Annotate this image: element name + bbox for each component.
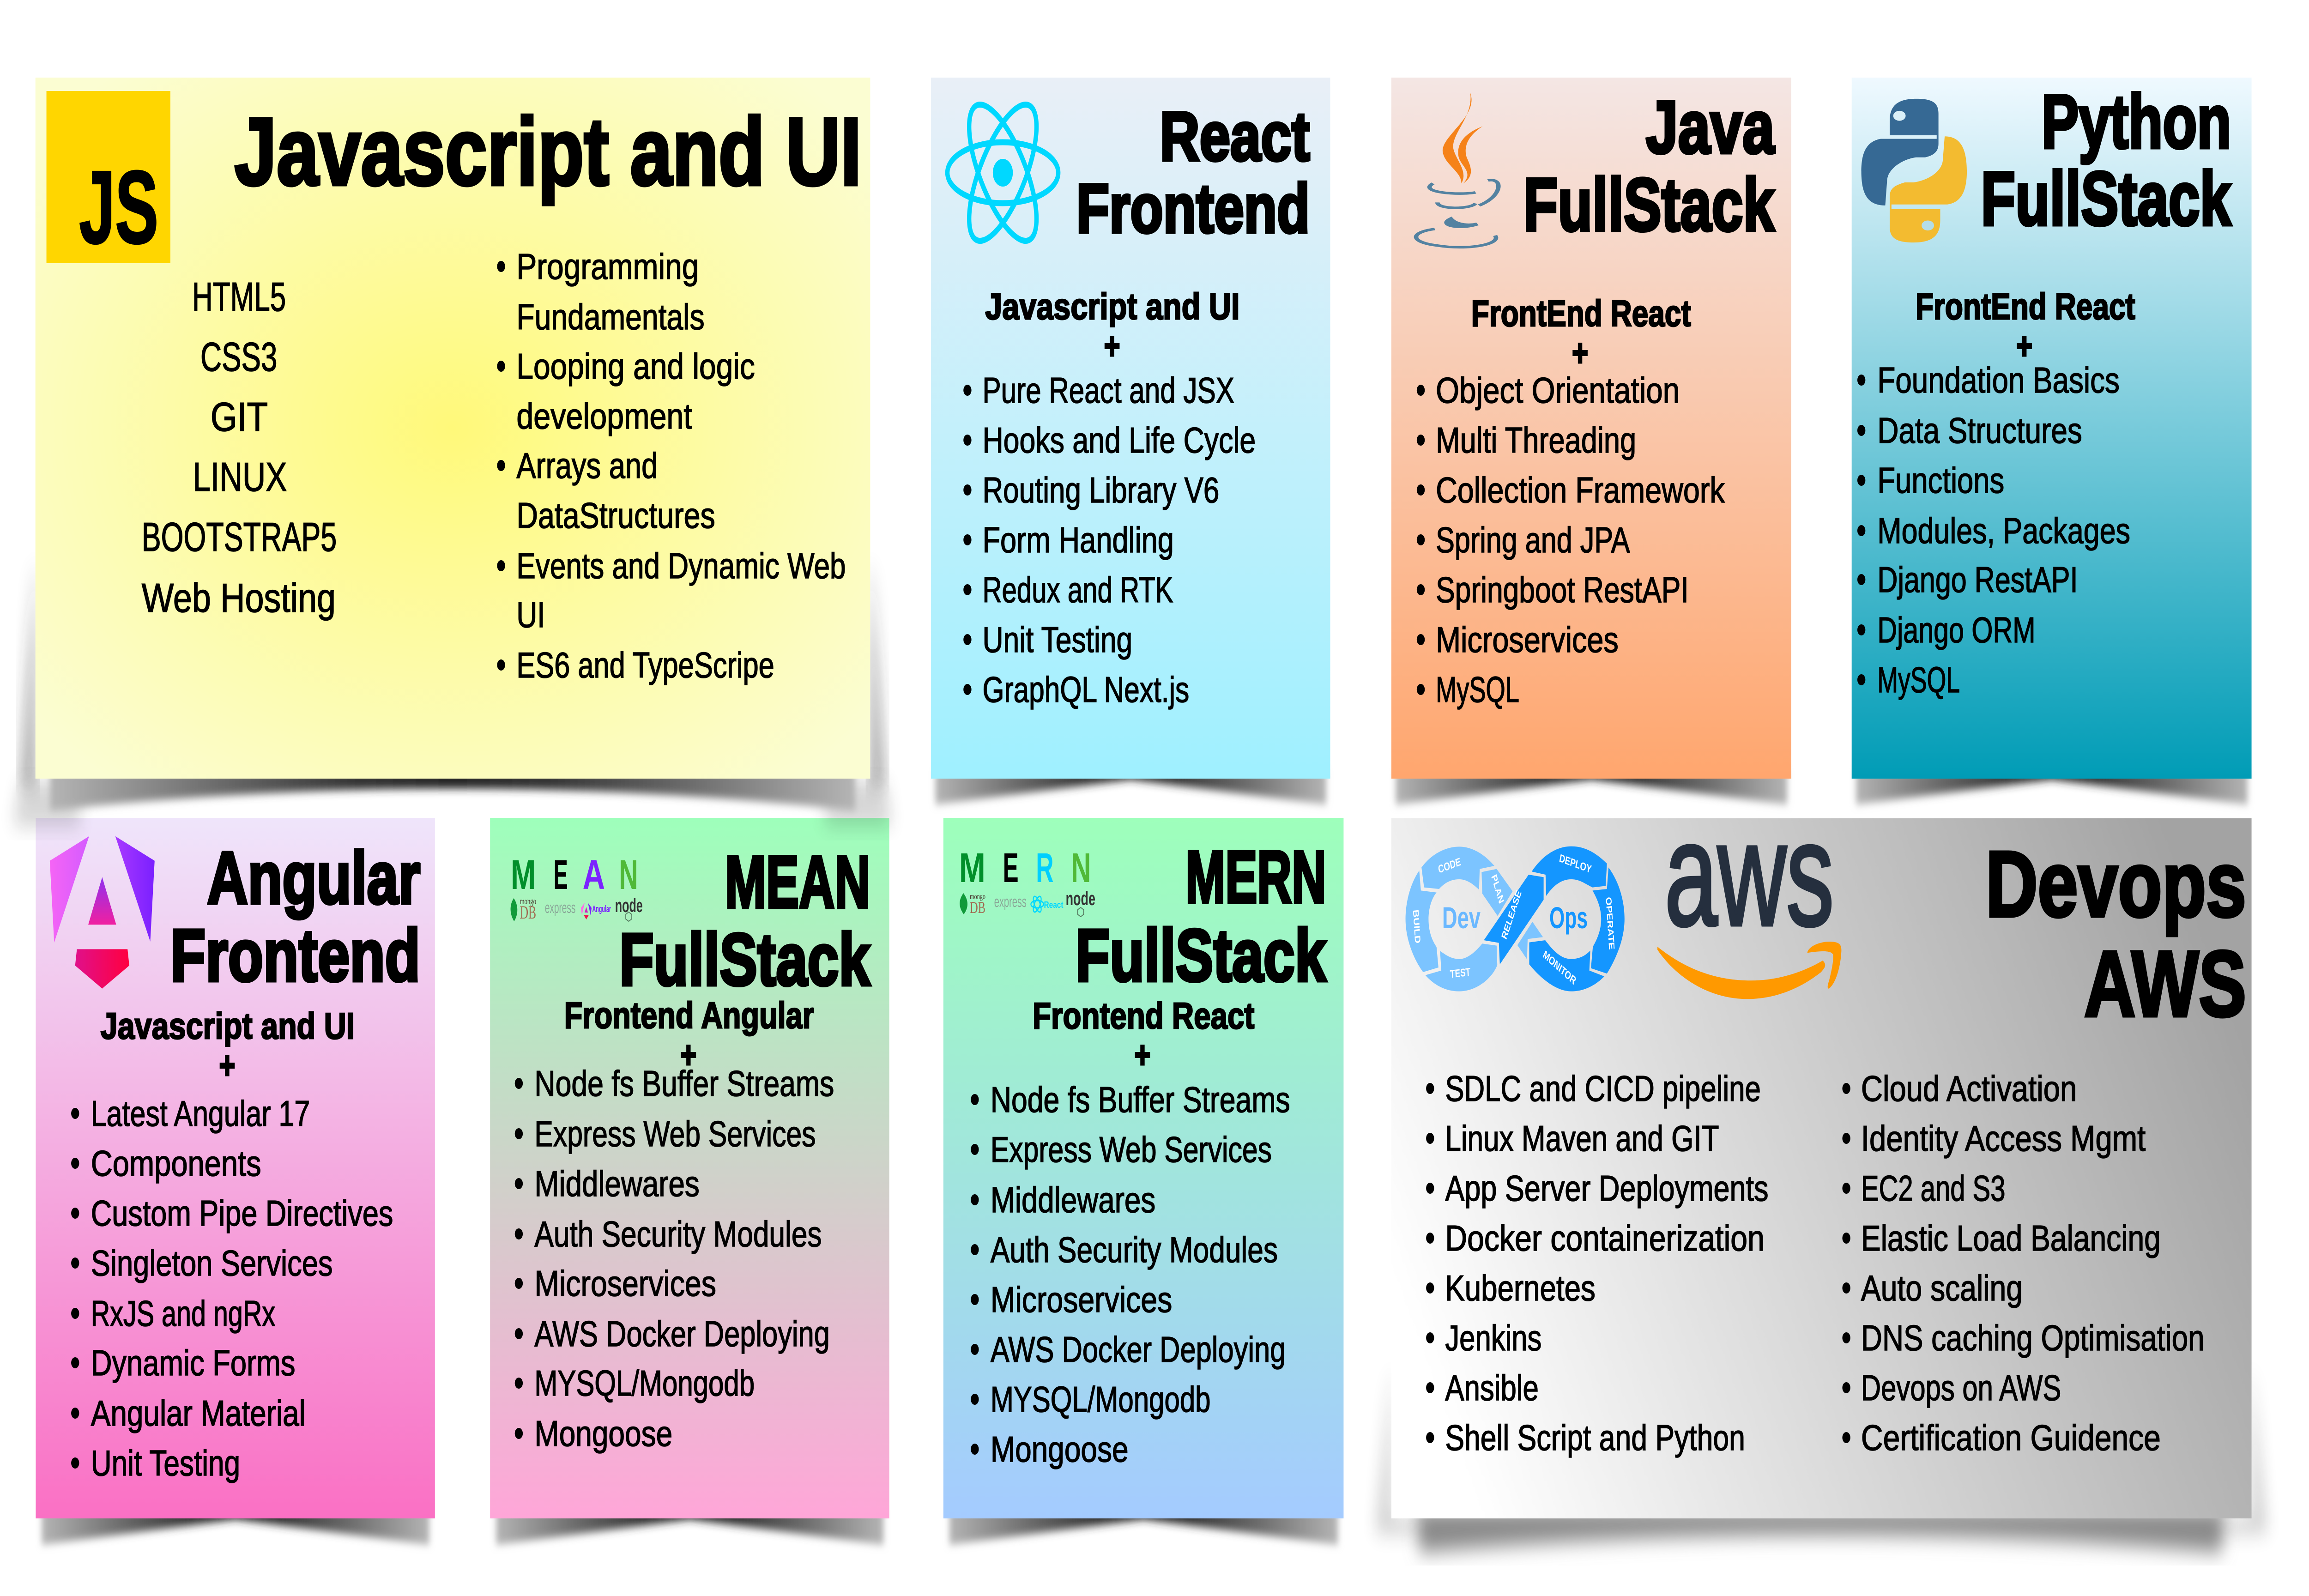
subheading [1033, 995, 1254, 1076]
subheading: FrontEnd React [1471, 293, 1691, 334]
list: Java topics [1417, 370, 1725, 710]
heading: FullStack [1523, 163, 1775, 246]
icon: DevOps infinity loop: PLAN [1489, 873, 1506, 905]
list: React topics: Routing Library V6 [982, 470, 1219, 510]
icon: DevOps infinity loop: Dev [1442, 901, 1481, 935]
heading [170, 837, 420, 997]
list: MERN topics: AWS Docker Deploying [991, 1330, 1286, 1370]
heading: FullStack [1981, 156, 2231, 242]
panel: MERN FullStack [943, 818, 1343, 1518]
icon: DevOps infinity loop: BUILD [1411, 909, 1422, 944]
subheading [564, 995, 814, 1076]
list: Angular topics [71, 1094, 393, 1483]
subheading: Frontend React [1033, 995, 1254, 1036]
list: AWS topics [1842, 1069, 2205, 1458]
list: AWS topics: Elastic Load Balancing [1861, 1218, 2161, 1258]
list: DevOps topics: Shell Script and Python [1445, 1418, 1745, 1458]
panel: Javascript and UI [36, 78, 870, 779]
list: MEAN topics: Node fs Buffer Streams [534, 1064, 834, 1104]
icon: AWS logo: aws [1665, 792, 1834, 957]
list: Java topics: Multi Threading [1436, 420, 1636, 460]
list: MEAN topics: Mongoose [534, 1414, 672, 1454]
subheading: Frontend Angular [564, 995, 814, 1036]
heading: FullStack [619, 919, 870, 1001]
list: JS fundamentals: ES6 and TypeScripe [516, 645, 774, 685]
icon: Java cup [1416, 93, 1499, 247]
subheading: + [2016, 325, 2032, 367]
icon: MERN logo [959, 845, 1095, 917]
list: core technologies: HTML5 [192, 274, 286, 320]
icon: DevOps infinity loop [1406, 846, 1625, 991]
icon: MERN logo: mongo [970, 892, 985, 901]
heading [1076, 97, 1310, 247]
list: MERN topics: Middlewares [991, 1180, 1155, 1220]
icon: Angular logo [50, 836, 155, 989]
list: React topics: GraphQL Next.js [982, 670, 1189, 710]
icon: Python logo [1862, 99, 1967, 242]
list: Angular topics: Angular Material [91, 1393, 306, 1433]
icon: DevOps infinity loop: TEST [1450, 966, 1471, 980]
heading: React [1160, 97, 1310, 175]
icon: DevOps infinity loop: MONITOR [1541, 949, 1578, 987]
icon: DevOps infinity loop: CODE [1437, 856, 1462, 876]
list: React topics: Redux and RTK [982, 570, 1173, 610]
list: DevOps topics: Docker containerization [1445, 1218, 1765, 1258]
panel background [36, 818, 435, 1518]
list: MEAN topics: Middlewares [534, 1164, 700, 1204]
list: MERN topics: Express Web Services [991, 1130, 1272, 1170]
icon: DevOps infinity loop: DEPLOY [1558, 852, 1592, 876]
list: React topics: Hooks and Life Cycle [982, 420, 1256, 460]
heading [1076, 836, 1326, 997]
subheading: + [681, 1034, 696, 1076]
list: Python topics: MySQL [1877, 660, 1960, 700]
panel background [943, 818, 1343, 1518]
list: JS fundamentals: Arrays and [516, 446, 658, 486]
list: Angular topics: RxJS and ngRx [91, 1294, 275, 1334]
list: Angular topics: Dynamic Forms [91, 1343, 295, 1383]
list: React topics: Pure React and JSX [982, 370, 1234, 411]
subheading [985, 286, 1239, 367]
list: core technologies [142, 274, 337, 621]
list: Java topics: Object Orientation [1436, 370, 1680, 411]
list: MERN topics: Mongoose [991, 1429, 1129, 1469]
list: Python topics [1857, 360, 2130, 700]
list: MERN topics: MYSQL/Mongodb [991, 1379, 1211, 1420]
icon: MEAN logo: express [545, 899, 575, 917]
icon: MEAN logo: DB [520, 902, 536, 923]
panel background [1852, 78, 2252, 779]
list: Java topics: Spring and JPA [1436, 520, 1630, 560]
list: AWS topics: EC2 and S3 [1861, 1168, 2005, 1209]
panel: Angular Frontend [36, 818, 435, 1518]
list: core technologies: GIT [211, 394, 268, 440]
list: MEAN topics: MYSQL/Mongodb [534, 1363, 755, 1403]
list: DevOps topics: Ansible [1445, 1368, 1539, 1408]
list: MERN topics: Microservices [991, 1280, 1172, 1320]
list: JS fundamentals: Events and Dynamic Web [516, 546, 846, 586]
icon: MEAN logo: M [511, 852, 536, 898]
list: MEAN topics: Auth Security Modules [534, 1214, 822, 1254]
list: DevOps topics: Linux Maven and GIT [1445, 1118, 1719, 1159]
heading: MEAN [725, 841, 870, 923]
panel background [1391, 78, 1791, 779]
list: core technologies: Web Hosting [142, 575, 336, 621]
list: JS fundamentals: development [516, 396, 692, 436]
icon: JS logo: JS [79, 150, 158, 265]
subheading: + [1104, 325, 1120, 367]
list: DevOps topics: Kubernetes [1445, 1268, 1596, 1308]
list: Python topics: Django ORM [1877, 610, 2036, 650]
list: Angular topics: Singleton Services [91, 1243, 332, 1283]
list: Java topics: Microservices [1436, 620, 1619, 660]
heading: Frontend [170, 914, 420, 997]
list: MEAN topics [515, 1064, 834, 1454]
heading [619, 841, 870, 1001]
list: core technologies: CSS3 [200, 334, 277, 380]
panel: Python FullStack [1852, 78, 2252, 779]
panel: MEAN FullStack [490, 818, 889, 1518]
subheading: Javascript and UI [101, 1005, 355, 1046]
list: Python topics: Modules, Packages [1877, 511, 2130, 551]
list: AWS topics: Certification Guidence [1861, 1418, 2161, 1458]
heading [1986, 832, 2246, 1036]
panel background [490, 818, 889, 1518]
heading: Angular [207, 837, 420, 919]
list: AWS topics: Cloud Activation [1861, 1069, 2077, 1109]
heading: Java [1646, 85, 1775, 169]
list: AWS topics: Identity Access Mgmt [1861, 1118, 2146, 1159]
list: Angular topics: Custom Pipe Directives [91, 1193, 393, 1233]
list: Python topics: Django RestAPI [1877, 560, 2078, 600]
panel background [1391, 818, 2252, 1518]
panel background [36, 78, 870, 779]
icon: MEAN logo [511, 852, 643, 923]
list: DevOps topics: App Server Deployments [1445, 1168, 1769, 1209]
list: Angular topics: Latest Angular 17 [91, 1094, 310, 1134]
list: JS fundamentals: Programming [516, 247, 699, 287]
panel: Java FullStack [1391, 78, 1791, 779]
list: JS fundamentals: UI [516, 595, 545, 635]
list: DevOps topics: Jenkins [1445, 1318, 1541, 1358]
subheading [101, 1005, 355, 1087]
list: Python topics: Foundation Basics [1877, 360, 2120, 400]
list: DevOps topics: SDLC and CICD pipeline [1445, 1069, 1761, 1109]
icon: MERN logo: R [1036, 845, 1054, 891]
icon: DevOps infinity loop: Ops [1549, 901, 1588, 935]
subheading: + [1572, 332, 1588, 374]
icon: MEAN logo: mongo [520, 896, 536, 907]
icon: MERN logo: N [1071, 845, 1091, 891]
icon: MEAN logo: E [554, 852, 568, 898]
heading [1523, 85, 1775, 246]
list: AWS topics: DNS caching Optimisation [1861, 1318, 2205, 1358]
icon: MEAN logo: Angular [592, 904, 611, 914]
icon: MERN logo: E [1003, 845, 1019, 891]
heading: Python [2042, 79, 2231, 164]
list: Python topics: Data Structures [1877, 411, 2082, 451]
subheading [1916, 286, 2135, 367]
heading: AWS [2084, 932, 2246, 1036]
list: MEAN topics: AWS Docker Deploying [534, 1314, 830, 1354]
icon: MERN logo: express [994, 893, 1027, 911]
icon: React atom [948, 91, 1058, 254]
list: Angular topics: Unit Testing [91, 1443, 240, 1483]
list: Java topics: Collection Framework [1436, 470, 1725, 510]
icon: MEAN logo: A [583, 852, 605, 898]
list: JS fundamentals: Looping and logic [516, 346, 755, 387]
list: JS fundamentals [497, 247, 846, 685]
icon: MERN logo: M [959, 845, 985, 891]
shadows: top row [13, 554, 2248, 827]
list: React topics [963, 370, 1256, 710]
icon: JS logo [47, 91, 170, 265]
list: JS fundamentals: Fundamentals [516, 297, 705, 337]
list: Java topics: Springboot RestAPI [1436, 570, 1689, 610]
subheading [1471, 293, 1691, 374]
icon: MEAN logo: node [615, 895, 643, 916]
list: core technologies: BOOTSTRAP5 [142, 514, 337, 560]
list: MERN topics: Auth Security Modules [991, 1230, 1278, 1270]
heading: Devops [1986, 832, 2246, 937]
panel: React Frontend [931, 78, 1330, 779]
icon: MERN logo: node [1066, 888, 1095, 909]
panel background [931, 78, 1330, 779]
shadows: bottom row [42, 1362, 2267, 1553]
subheading: FrontEnd React [1916, 286, 2135, 327]
list: Java topics: MySQL [1436, 670, 1519, 710]
heading: Frontend [1076, 169, 1310, 247]
icon: DevOps infinity loop: RELEASE [1500, 889, 1523, 941]
list: Angular topics: Components [91, 1143, 261, 1184]
list: MERN topics: Node fs Buffer Streams [991, 1080, 1290, 1120]
list: React topics: Form Handling [982, 520, 1174, 560]
list: AWS topics: Devops on AWS [1861, 1368, 2061, 1408]
list: Python topics: Functions [1877, 460, 2004, 501]
subheading: Javascript and UI [985, 286, 1239, 327]
heading [1981, 79, 2231, 242]
icon: MEAN logo: N [619, 852, 638, 898]
icon: DevOps infinity loop: OPERATE [1604, 896, 1616, 950]
list: MERN topics [971, 1080, 1290, 1469]
list: AWS topics: Auto scaling [1861, 1268, 2023, 1308]
heading: Javascript and UI [235, 98, 862, 206]
list: JS fundamentals: DataStructures [516, 496, 715, 536]
list: MEAN topics: Microservices [534, 1264, 716, 1304]
list: DevOps topics [1426, 1069, 1769, 1458]
heading: FullStack [1076, 914, 1326, 997]
list: React topics: Unit Testing [982, 620, 1132, 660]
list: core technologies: LINUX [193, 454, 287, 500]
subheading: + [1135, 1034, 1150, 1076]
subheading: + [219, 1045, 235, 1087]
icon: MERN logo: DB [970, 898, 985, 917]
icon: MERN logo: React [1044, 900, 1064, 910]
list: MEAN topics: Express Web Services [534, 1114, 816, 1154]
heading: MERN [1185, 836, 1326, 918]
panel: Devops AWS [1391, 792, 2252, 1518]
